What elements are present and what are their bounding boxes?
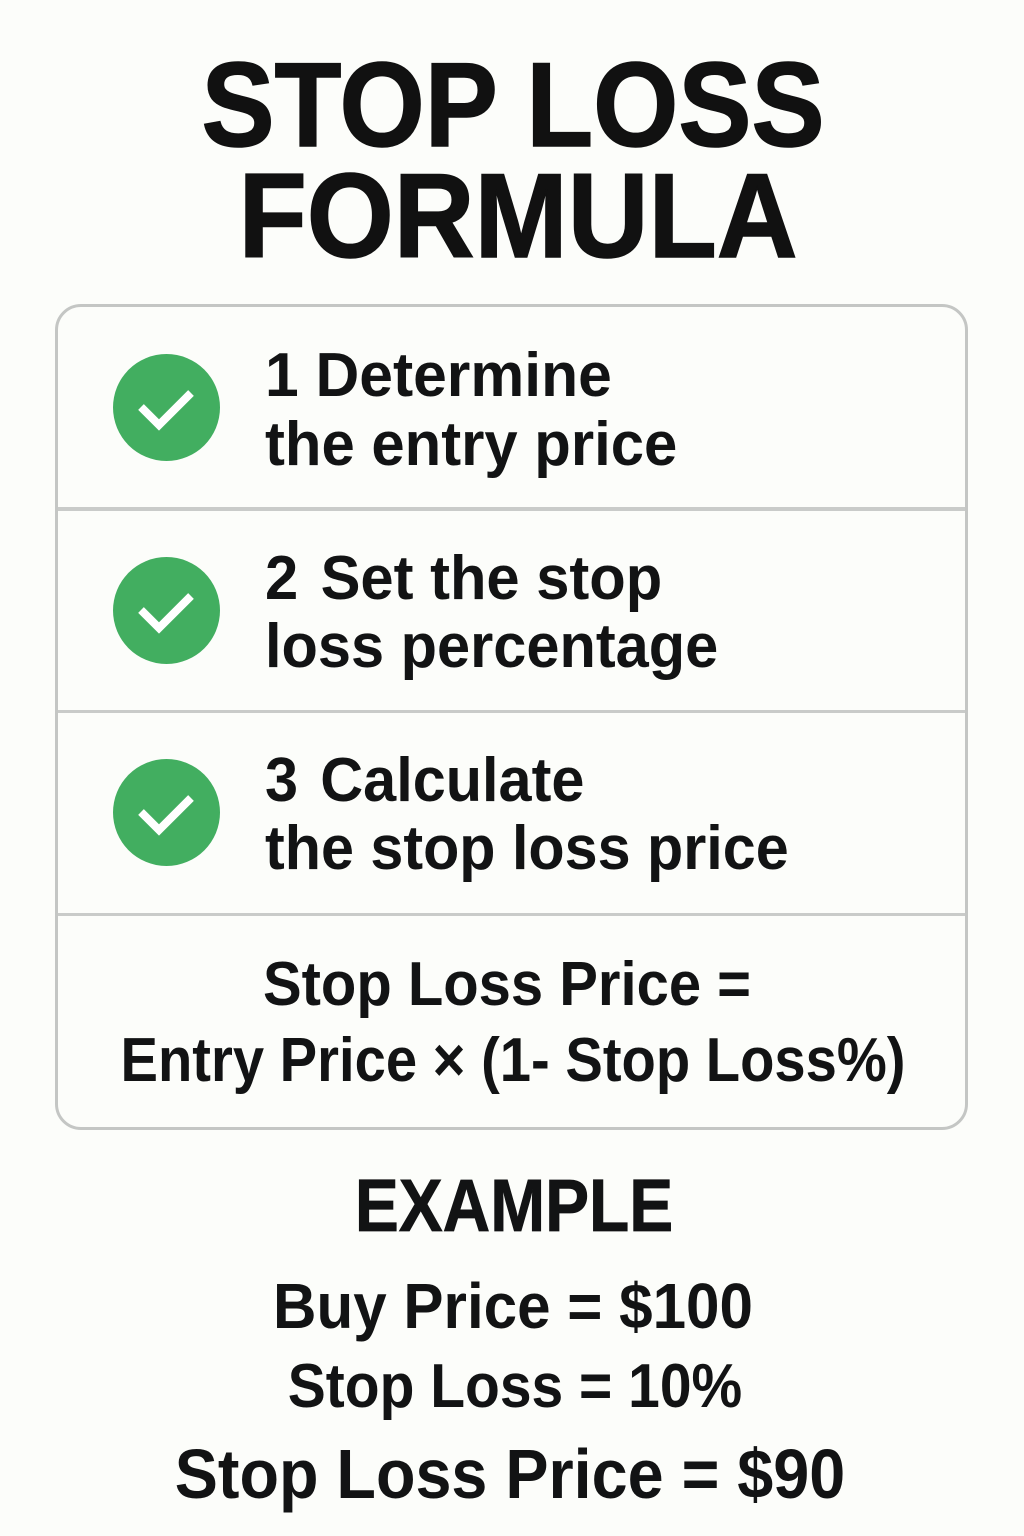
example stop loss: Stop Loss = 10%	[287, 1352, 742, 1420]
title	[201, 38, 825, 283]
step 2 text: loss percentage	[265, 612, 718, 680]
panel: steps and formula	[55, 304, 968, 1130]
formula: Stop Loss Price =	[262, 950, 751, 1018]
step 3 text: 3 Calculate	[265, 746, 584, 814]
formula	[120, 950, 905, 1094]
title: STOP LOSS	[201, 38, 825, 172]
step 2 text: 2 Set the stop	[265, 544, 662, 612]
step 1 text: the entry price	[265, 410, 677, 478]
step 3 text	[265, 746, 789, 882]
icon: check 3	[113, 759, 220, 866]
icon: check 2	[113, 557, 220, 664]
example heading: EXAMPLE	[354, 1164, 673, 1247]
example stop loss price: Stop Loss Price = $90	[175, 1435, 845, 1513]
step 3 text: the stop loss price	[265, 814, 789, 882]
step 1 text: 1 Determine	[265, 340, 612, 410]
step 1 text	[265, 340, 677, 478]
formula: Entry Price × (1- Stop Loss%)	[120, 1026, 905, 1094]
step 2 text	[265, 544, 718, 680]
icon: check 1	[113, 354, 220, 461]
title: FORMULA	[238, 149, 797, 283]
example buy price: Buy Price = $100	[273, 1270, 752, 1342]
